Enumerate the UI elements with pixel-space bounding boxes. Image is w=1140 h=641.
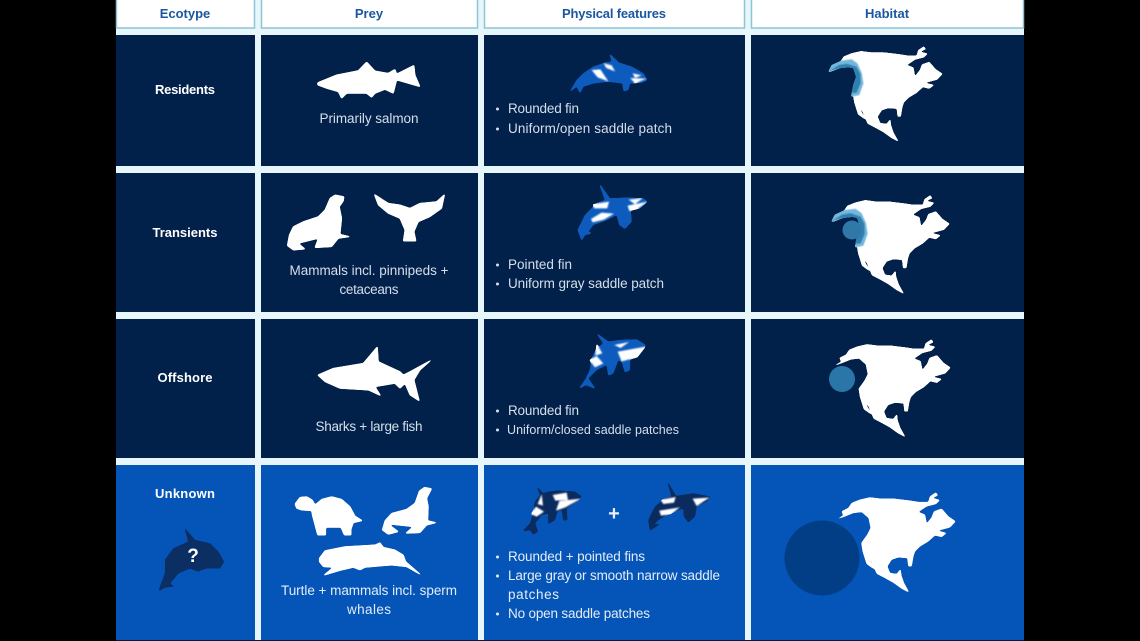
icon: sperm whale [319,543,421,575]
features cell: Transients: Pointed fin [508,257,572,272]
map: North America with coastal range [827,46,943,142]
header: Physical features [484,0,744,28]
map: North America [832,339,951,437]
features cell: Unknown: patches [508,587,559,602]
row: Unknown [116,465,1024,641]
habitat spot: Transients [842,220,862,240]
prey cell: turtle and mammals: whales [346,602,391,617]
features cell: Offshore: Uniform/closed saddle patches [507,423,679,437]
row: Offshore [116,319,1024,458]
prey cell: mammals [261,173,478,312]
features cell: Residents: Uniform/open saddle patch [508,121,672,136]
prey cell: turtle and mammals: Turtle + mammals incl. sperm [281,583,457,598]
header: Ecotype [116,0,254,28]
habitat cell: Residents [751,35,1024,166]
header: Habitat [752,0,1024,28]
features cell: Offshore [484,319,745,458]
header: Prey [262,0,478,28]
icon: shark [318,347,431,401]
prey cell: mammals: Mammals incl. pinnipeds + [290,263,449,278]
icon: turtle [295,497,362,535]
features cell: Offshore: Rounded fin [508,403,579,418]
features cell: Unknown: Large gray or smooth narrow saddle [508,568,720,583]
features cell: Residents: Rounded fin [508,101,579,116]
row: Residents [116,35,1024,166]
icon: orca with rounded fin [523,486,582,535]
habitat spot: Offshore [829,366,855,392]
prey cell: mammals: cetaceans [340,282,399,297]
map: North America with coastal range [830,195,950,294]
ecotype cell: Transients [116,173,255,312]
ecotype cell: Offshore: Offshore [158,370,212,385]
features cell: Unknown: Rounded + pointed fins [508,549,645,564]
ecotype cell: Transients: Transients [152,225,218,240]
icon: unknown orca [159,528,224,591]
icon: whale fluke [374,194,445,241]
icon: resident orca [569,53,647,93]
ecotype cell: Unknown: Unknown [155,486,215,501]
icon: sea lion [287,195,350,250]
features cell: Transients: Uniform gray saddle patch [508,276,664,291]
habitat spot: Unknown [784,520,860,596]
icon: salmon [318,62,420,98]
prey cell: turtle and mammals [261,465,478,641]
ecotype cell: Unknown [116,465,255,641]
features cell: Unknown: No open saddle patches [508,606,650,621]
icon: transient orca [578,182,647,241]
row: Transients [116,173,1024,312]
ecotype cell: Offshore [116,319,255,458]
ecotype cell: Residents [116,35,255,166]
prey cell: sharks [261,319,478,458]
features cell: Residents [484,35,745,166]
icon: orca with pointed fin [648,480,711,531]
ecotype cell: Residents: Residents [155,82,215,97]
header: Prey: Prey [355,6,384,21]
header: Ecotype: Ecotype [160,6,210,21]
prey cell: sharks: Sharks + large fish [316,419,422,434]
habitat cell: Transients [751,173,1024,312]
icon: offshore orca [579,333,646,389]
habitat cell: Unknown [751,465,1024,641]
ecotype cell: Unknown: ? [187,546,199,567]
features cell: Unknown [484,465,745,641]
background [116,0,1024,641]
features cell: Transients [484,173,745,312]
icon: sea lion [382,487,436,534]
plus sign: + [608,503,620,525]
map: North America [834,492,956,593]
prey cell: salmon: Primarily salmon [320,111,418,126]
header: Physical features: Physical features [562,6,666,21]
habitat cell: Offshore [751,319,1024,458]
prey cell: salmon [261,35,478,166]
header: Habitat: Habitat [865,6,910,21]
